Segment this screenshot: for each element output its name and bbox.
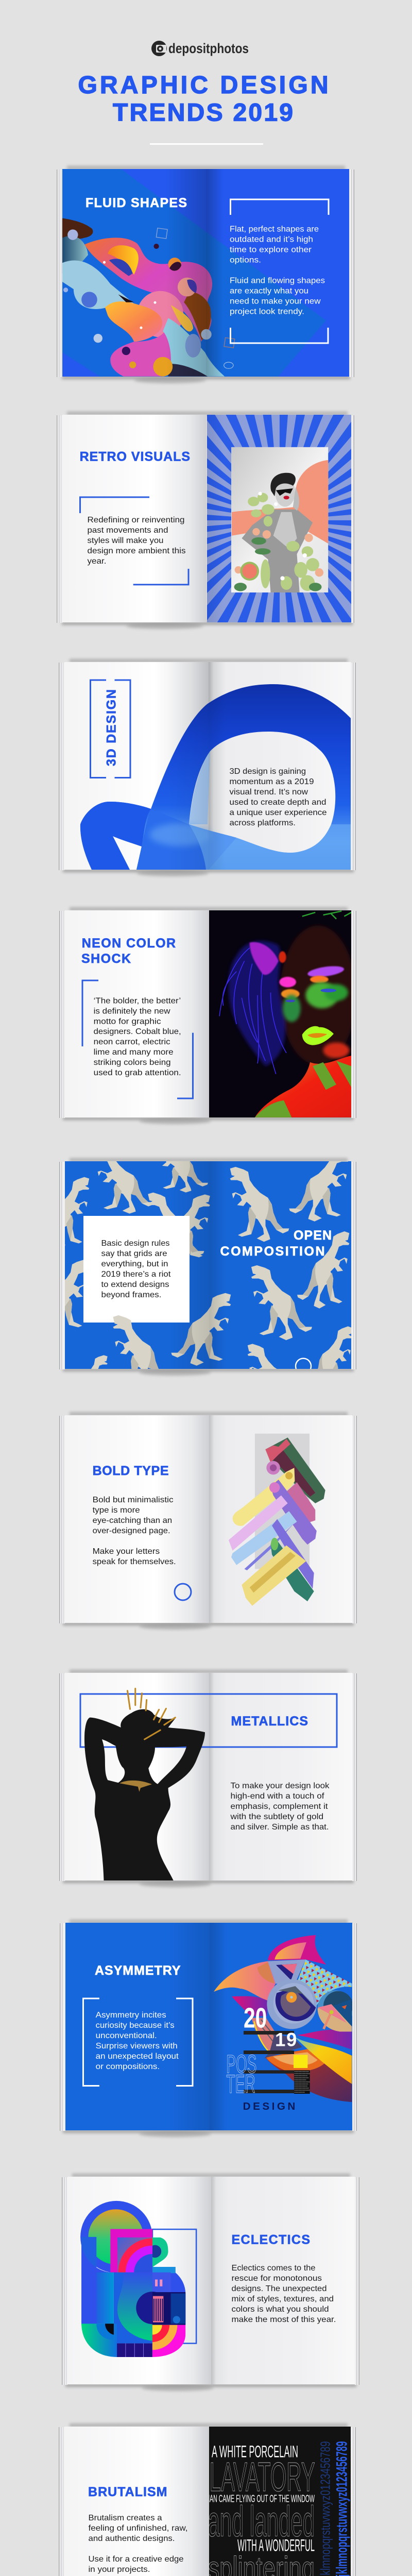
- body text: an unexpected layout: [96, 2052, 179, 2061]
- heading: eclectics: ECLECTICS: [232, 2233, 310, 2247]
- body text: eye-catching than an: [93, 1516, 172, 1525]
- poster: brutalist type: [205, 2441, 350, 2576]
- body text: and silver. Simple as that.: [231, 1823, 329, 1832]
- body text: [230, 767, 327, 827]
- body text: outdated and it’s high: [230, 235, 313, 244]
- body text: [232, 2264, 336, 2324]
- body text: Surprise viewers with: [96, 2042, 178, 2050]
- heading: asymmetry: ASYMMETRY: [95, 1963, 181, 1978]
- body text: Asymmetry incites: [96, 2011, 166, 2020]
- body text: across platforms.: [230, 819, 296, 827]
- body text: design more ambient this: [88, 547, 185, 555]
- body text: emphasis, complement it: [231, 1802, 328, 1811]
- body text: speak for themselves.: [93, 1557, 176, 1566]
- poster illustration: POS: [226, 2049, 256, 2078]
- illustration: fluid shapes: [62, 218, 235, 377]
- body text: options.: [230, 256, 261, 265]
- heading: 3D design (vertical): 3D DESIGN: [104, 689, 118, 766]
- circle outline: [175, 1584, 191, 1600]
- heading: neon color shock: SHOCK: [81, 952, 131, 966]
- illustration: sunburst: [207, 415, 351, 622]
- body text: designs. The unexpected: [232, 2284, 327, 2293]
- panel: bold type book: [59, 1412, 357, 1630]
- body text: designers. Cobalt blue,: [94, 1027, 181, 1036]
- body text: colors is what you should: [232, 2305, 329, 2314]
- frame brackets: [83, 1998, 193, 2086]
- body text: Redefining or reinventing: [88, 516, 184, 524]
- body text: Bold but minimalistic: [93, 1496, 174, 1504]
- body text: [94, 996, 181, 1077]
- body text: over-designed page.: [93, 1527, 170, 1535]
- body text: with the subtlety of gold: [230, 1812, 323, 1821]
- panel: 3D design book: [59, 659, 356, 876]
- panel: neon color shock book: [59, 907, 356, 1124]
- body text: lime and many more: [94, 1048, 174, 1057]
- panel: fluid shapes book: [57, 166, 354, 383]
- body text: Eclectics comes to the: [232, 2264, 316, 2273]
- heading frame: [80, 1694, 337, 1747]
- body text: Use it for a creative edge: [89, 2555, 184, 2564]
- body text: striking colors being: [94, 1058, 171, 1067]
- heading: neon color shock: [81, 936, 176, 966]
- dinosaur overlapping box: [113, 1315, 159, 1369]
- body text: high-end with a touch of: [231, 1792, 324, 1801]
- body text: [96, 2011, 179, 2071]
- body text: or compositions.: [96, 2062, 160, 2071]
- heading: fluid shapes: FLUID SHAPES: [85, 196, 187, 210]
- heading: open composition: COMPOSITION: [220, 1244, 324, 1259]
- body text: styles will make you: [88, 536, 164, 545]
- body text: [89, 2514, 187, 2574]
- body text: momentum as a 2019: [230, 777, 314, 786]
- brackets: [80, 497, 188, 585]
- photo: woman silhouette: [84, 1689, 205, 1880]
- panel: eclectics book: [62, 2174, 359, 2391]
- collage: retro woman: [231, 447, 328, 592]
- body text: [93, 1496, 176, 1566]
- panel: metallics book: [59, 1670, 357, 1887]
- heading: retro visuals: RETRO VISUALS: [80, 449, 190, 464]
- body text: and authentic designs.: [89, 2534, 175, 2543]
- body text: used to grab attention.: [94, 1069, 181, 1077]
- body text: time to explore other: [230, 245, 312, 255]
- poster illustration: TER: [226, 2070, 255, 2098]
- body text: say that grids are: [101, 1249, 167, 1258]
- body text: past movements and: [88, 526, 168, 535]
- poster illustration: DESIGN: [243, 2100, 295, 2112]
- body text: Make your letters: [93, 1547, 160, 1556]
- body text: Flat, perfect shapes are: [230, 225, 319, 234]
- photo: neon face: [209, 910, 356, 1117]
- panel: retro visuals book: [57, 412, 383, 629]
- body text: make the most of this year.: [232, 2315, 336, 2324]
- heading: neon color shock: NEON COLOR: [82, 936, 176, 951]
- body text: neon carrot, electric: [94, 1038, 170, 1046]
- body text: ‘The bolder, the better’: [94, 996, 181, 1006]
- body text: visual trend. It’s now: [230, 788, 308, 796]
- logo: depositphotos: depositphotos: [168, 41, 249, 56]
- frame around 3D design: [91, 680, 130, 778]
- body text: 2019 there’s a riot: [101, 1270, 171, 1279]
- body text: a unique user experience: [230, 808, 327, 817]
- body text: [101, 1239, 171, 1299]
- illustration: 3D letters: [229, 1434, 325, 1606]
- poster: brutalist type: WITH A WONDERFUL: [237, 2536, 315, 2555]
- white text box: [83, 1216, 190, 1323]
- circle outline: [296, 1359, 311, 1369]
- brackets: [82, 980, 193, 1098]
- body text: everything, but in: [101, 1260, 168, 1268]
- body text: mix of styles, textures, and: [232, 2295, 334, 2303]
- heading: metallics: METALLICS: [231, 1714, 308, 1728]
- body text: used to create depth and: [230, 798, 327, 807]
- body text: unconventional.: [96, 2031, 157, 2040]
- panel: open composition book: [59, 1157, 356, 1377]
- poster illustration: 20: [244, 2002, 267, 2034]
- body text: type is more: [93, 1506, 140, 1515]
- body text: are exactly what you: [230, 286, 308, 296]
- body text: 3D design is gaining: [230, 767, 306, 776]
- body text: year.: [88, 557, 106, 566]
- body text: beyond frames.: [101, 1291, 162, 1299]
- body text: is definitely the new: [94, 1007, 170, 1016]
- heading: open composition: [220, 1228, 332, 1259]
- body text: to extend designs: [101, 1280, 169, 1289]
- body text: feeling of unfinished, raw,: [89, 2524, 187, 2533]
- title: TRENDS 2019: [113, 99, 293, 127]
- illustration: eclectic collage: [80, 2201, 196, 2357]
- frame brackets: [231, 199, 329, 343]
- pattern: white dinosaurs: [32, 1138, 352, 1411]
- body text: in your projects.: [89, 2565, 150, 2574]
- body text: rescue for monotonous: [232, 2274, 322, 2283]
- body text: Brutalism creates a: [89, 2514, 162, 2522]
- panel: brutalism book: [59, 2424, 356, 2576]
- heading: open composition: OPEN: [294, 1228, 332, 1243]
- heading: bold type: BOLD TYPE: [93, 1464, 169, 1478]
- body text: Basic design rules: [101, 1239, 170, 1248]
- body text: To make your design look: [231, 1782, 330, 1790]
- body text: [230, 1782, 330, 1832]
- poster illustration: 9: [286, 2029, 297, 2050]
- poster: brutalist type: A WHITE PORCELAIN: [212, 2442, 298, 2461]
- body text: [88, 516, 185, 566]
- poster illustration: 1: [275, 2029, 285, 2050]
- body text: Fluid and flowing shapes: [230, 276, 325, 285]
- body text: curiosity because it’s: [96, 2021, 175, 2030]
- poster illustration: [214, 1935, 354, 2112]
- illustration: 3D blue tube: [80, 684, 351, 870]
- heading: brutalism: BRUTALISM: [88, 2485, 167, 2499]
- title: GRAPHIC DESIGN: [78, 72, 329, 99]
- body text: project look trendy.: [230, 307, 304, 316]
- panel: asymmetry book: [60, 1920, 357, 2137]
- title: [78, 72, 329, 127]
- body text: need to make your new: [230, 297, 321, 306]
- body text: [230, 225, 325, 316]
- body text: motto for graphic: [94, 1017, 161, 1026]
